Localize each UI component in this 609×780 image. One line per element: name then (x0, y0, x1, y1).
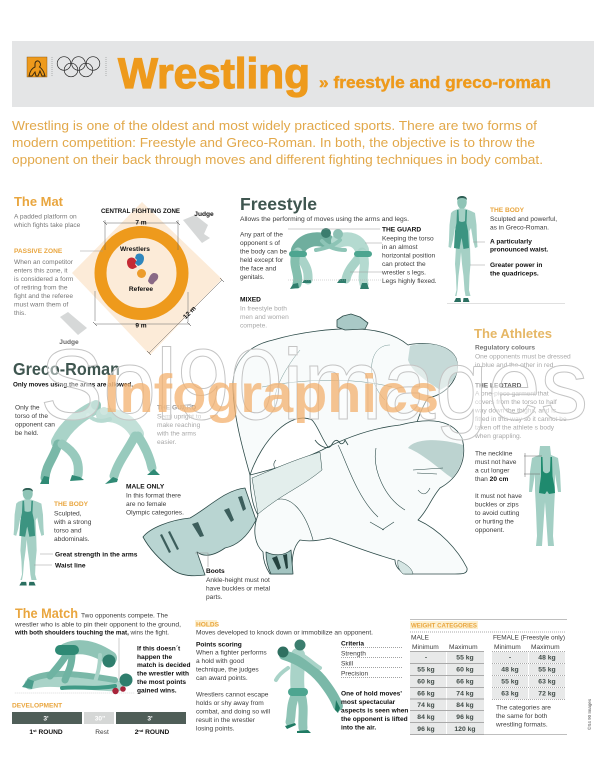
text: the guard: with the arms (156, 430, 197, 438)
table: male: 74 kg (456, 690, 474, 698)
text: only the torso: torso of the (15, 413, 48, 420)
text: greco-roman body notes: abdominals. (54, 536, 90, 543)
text: male only: MALE ONLY (126, 484, 165, 490)
illustration: greco-roman body (14, 488, 44, 586)
zone labels: 12 m (182, 305, 198, 321)
table: male: 120 kg (454, 726, 476, 733)
table: female: 48 kg (538, 654, 556, 662)
head: top wrestler hair (408, 344, 458, 390)
intro paragraph: Wrestling is one of the oldest and most widely practiced sports. There are two forms of (12, 118, 537, 133)
intro paragraph: opponent on their back through moves and different fighting techniques in body combat. (12, 152, 543, 167)
intro paragraph (12, 118, 543, 167)
note: categories: The categories are (496, 704, 551, 712)
heading: weight categories: WEIGHT CATEGORIES (411, 622, 478, 630)
text: freestyle body notes: as in Greco-Roman. (490, 224, 549, 232)
timeline: development: 30" (95, 716, 105, 722)
text: the guard: easier. (157, 439, 177, 446)
criteria list: Skill (341, 660, 354, 668)
table: male: 96 kg (417, 726, 435, 733)
text: any part: genitals. (240, 274, 265, 281)
text: the guard: Semi upright to (157, 414, 202, 420)
text: points scoring: technique, the judges (196, 666, 259, 674)
text: male only: In this format there (126, 492, 181, 500)
text: boots (206, 568, 271, 601)
table: female: 55 kg (538, 666, 556, 674)
zone labels: Referee (129, 286, 153, 293)
text: the leotard: when grappling. (474, 433, 522, 440)
match description: with both shoulders touching the mat, wins the fight. (14, 630, 169, 636)
zone labels: Wrestlers (120, 246, 150, 253)
text: boots: have buckles or metal (206, 586, 271, 592)
table: female: 72 kg (538, 690, 556, 698)
panel: greco-roman (13, 359, 202, 586)
text: greco-roman body notes: Sculpted, (54, 510, 82, 518)
text: spectacular: into the air. (341, 724, 376, 732)
table: female: Minimum (494, 644, 521, 651)
table: male: 60 kg (417, 678, 435, 686)
table: female: 63 kg (538, 678, 556, 686)
text: the guard: can protect the (382, 261, 426, 268)
text: any part: opponent s of (240, 240, 280, 247)
text: greco-roman body notes: with a strong (53, 519, 92, 526)
text: greco-roman body notes: Great strength in the arms (55, 552, 138, 558)
mat description (13, 214, 81, 229)
text: if this doesn't happen: the wrestler with (137, 670, 189, 678)
table: male: 55 kg (456, 654, 474, 662)
zone labels: 7 m (135, 220, 147, 226)
table: male: 84 kg (417, 714, 435, 721)
text: buckles (475, 493, 522, 534)
text: the leotard: way down the thighs, and is (474, 408, 557, 414)
table: male: 96 kg (456, 714, 474, 721)
zone labels: Judge (194, 211, 214, 218)
passive zone text: fight and the referee (14, 293, 73, 300)
illustration: lifting hold (276, 640, 340, 733)
text: the leotard: taken off the athlete s body (475, 424, 555, 432)
table: male: - (425, 654, 427, 662)
mat description: A padded platform on (14, 214, 77, 220)
text: only the torso (15, 404, 55, 437)
heading: freestyle: Freestyle (240, 194, 317, 214)
illustration: pinning wrestlers (15, 638, 135, 694)
text: freestyle body notes: THE BODY (490, 207, 525, 214)
head: bottom wrestler hair (408, 440, 463, 478)
note: categories: the same for both (496, 713, 548, 720)
text: buckles: It must not have (475, 493, 522, 500)
text: points scoring (196, 642, 271, 732)
match description (14, 612, 181, 636)
text: freestyle body notes (490, 207, 557, 278)
illustration: greco-roman wrestlers (40, 400, 160, 484)
table: female: Maximum (531, 644, 560, 651)
timeline: development: 3' (147, 716, 153, 722)
text: mixed: In freestyle both (240, 306, 287, 312)
text: the leotard: covers from the torso to half (475, 399, 557, 406)
text: spectacular: aspects is seen when (341, 708, 408, 714)
text: only the torso: Only the (15, 404, 40, 412)
timeline: development: Rest (95, 729, 109, 736)
heading: holds: HOLDS (196, 622, 220, 628)
match description: Two opponents compete. The (81, 612, 168, 620)
timeline: development: 2 (135, 729, 138, 736)
text: neckline: than 20 cm (475, 476, 509, 483)
text: the leotard (474, 382, 567, 440)
text: neckline: a cut longer (475, 468, 510, 474)
table: male: MALE (411, 634, 430, 642)
table: male: 66 kg (417, 690, 435, 698)
top wrestler back (233, 329, 457, 475)
text: male only (126, 484, 184, 516)
text: boots: Ankle-height must not (206, 577, 270, 584)
zone labels: Judge (59, 339, 79, 346)
text: points scoring: a hold with good (196, 658, 244, 665)
text: male only: are no female (126, 501, 167, 508)
passive zone text: PASSIVE ZONE (14, 248, 63, 255)
text: mixed: men and women (240, 314, 289, 321)
freestyle description: Allows the performing of moves using the arms and legs. (240, 216, 409, 223)
icon: olympic rings (52, 57, 106, 77)
timeline: development: DEVELOPMENT (12, 702, 62, 710)
text: boots: Boots (206, 568, 225, 575)
text: neckline: The neckline (475, 450, 513, 458)
text: neckline: must not have (475, 459, 517, 466)
table: female: - (509, 654, 511, 662)
table: male: Minimum (412, 644, 439, 651)
text: spectacular: One of hold moves' (341, 690, 402, 698)
text: freestyle body notes: pronounced waist. (490, 246, 548, 254)
table: male: 55 kg (417, 666, 435, 674)
table: female: 48 kg (501, 666, 519, 674)
zone labels: CENTRAL FIGHTING ZONE (101, 208, 181, 215)
panel: the mat (12, 194, 592, 736)
heading: greco-roman: Greco-Roman (13, 359, 120, 379)
timeline: development: 1 (29, 729, 33, 736)
heading: the mat: The Mat (14, 194, 64, 209)
text: points scoring: Points scoring (196, 642, 242, 648)
text: mixed (240, 296, 289, 330)
passive zone text: of retiring from the (14, 284, 68, 292)
table: male: Maximum (449, 644, 478, 651)
text: the leotard: THE LEOTARD (475, 382, 522, 390)
timeline: development: st (33, 728, 37, 733)
timeline: development: 3' (43, 716, 49, 722)
text: regulatory colours (475, 344, 571, 369)
illustration: freestyle wrestlers (290, 228, 369, 289)
text: points scoring: losing points. (196, 726, 235, 732)
text: regulatory colours: in blue and the other in red. (475, 362, 555, 369)
holds description: Moves developed to knock down or immobilize an opponent. (196, 630, 373, 636)
text: buckles: opponent. (475, 527, 505, 534)
panel: the match (12, 606, 191, 736)
note: categories (495, 704, 551, 728)
criteria list: Criteria (341, 640, 364, 648)
intro paragraph: modern competition: Freestyle and Greco-Roman. In both, the objective is to throw the (12, 135, 535, 150)
text: points scoring: can award points. (196, 675, 248, 682)
zone labels: 9 m (135, 322, 147, 330)
credit: ©S4 90 Images (586, 698, 592, 730)
table: female: FEMALE (Freestyle only) (493, 634, 565, 642)
text: if this doesn't happen: the most points (137, 679, 186, 686)
text: greco-roman body notes: THE BODY (54, 501, 89, 508)
text: points scoring: When a fighter performs (196, 650, 267, 656)
text: the leotard: A one-piece garment that (475, 390, 549, 398)
greco-roman description: Only moves using the arms are allowed. (13, 382, 133, 388)
mat diagram (59, 202, 224, 355)
title: Wrestling (118, 50, 310, 98)
text: only the torso: be held. (15, 430, 39, 437)
text: if this doesn't happen (137, 646, 191, 694)
icon: wrestling pictogram (27, 57, 47, 77)
illustration: freestyle body (448, 196, 478, 302)
illustration: central wrestlers line drawing (143, 314, 467, 576)
heading: the match: The Match (15, 606, 78, 621)
text: any part: the face and (240, 266, 277, 272)
table: male: 84 kg (456, 702, 474, 709)
table: female (492, 634, 565, 700)
passive zone text: is considered a form (14, 276, 74, 283)
text: the guard: THE GUARD (157, 404, 196, 412)
text: points scoring: result in the wrestler (196, 717, 256, 724)
text: spectacular: the opponent is lifted (341, 716, 408, 723)
text: any part: the body can be (240, 248, 287, 256)
text: male only: Olympic categories. (126, 510, 184, 516)
text: boots: parts. (206, 594, 223, 601)
bottom wrestler body (250, 421, 467, 574)
mat description: which fights take place (13, 222, 81, 229)
text: the guard: THE GUARD (382, 226, 421, 234)
header band (12, 41, 594, 107)
text: spectacular (341, 690, 408, 732)
icon: wrestlers and referee (127, 254, 158, 284)
passive zone text: When an competitor (14, 259, 74, 266)
passive zone text (14, 248, 74, 317)
text: the guard: Legs highly flexed. (382, 278, 437, 285)
criteria list: Precision (341, 670, 368, 678)
passive zone text: this. (14, 310, 26, 317)
panel: weight categories (410, 620, 567, 734)
panel: freestyle (240, 194, 565, 330)
table: male: 74 kg (417, 702, 435, 709)
match description: wrestler who is able to pin their opponent to the ground, (14, 622, 181, 628)
timeline: development: ROUND (143, 729, 170, 736)
table: female: 55 kg (501, 678, 519, 686)
text: freestyle body notes: Sculpted and powerful, (490, 216, 557, 223)
note: categories: wrestling formats. (495, 722, 548, 728)
text: regulatory colours: Regulatory colours (475, 344, 535, 352)
table: male (410, 634, 484, 734)
illustration: leotard figure (524, 446, 561, 546)
text: any part: held except for (240, 257, 284, 264)
subtitle: » freestyle and greco-roman (319, 74, 551, 92)
text: the guard: Keeping the torso (382, 236, 434, 242)
text: freestyle body notes: A particularly (490, 238, 532, 246)
table: male: 66 kg (456, 678, 474, 686)
text: if this doesn't happen: If this doesn´t (137, 646, 181, 652)
table: female: 63 kg (501, 690, 519, 698)
text: the guard: make reaching (157, 422, 201, 429)
watermark: Sol90images: Sol90images (40, 329, 588, 441)
text: the guard (156, 404, 202, 446)
criteria list (341, 640, 402, 678)
text: neckline (475, 450, 517, 483)
text: if this doesn't happen: match is decided (137, 662, 191, 669)
text: spectacular: most spectacular (341, 699, 396, 706)
text: greco-roman body notes: torso and (54, 528, 82, 534)
text: the guard (381, 226, 437, 285)
passive zone text: must warn them of (14, 302, 68, 308)
passive zone text: enters this zone, it (14, 268, 68, 274)
text: greco-roman body notes: Waist line (55, 562, 86, 570)
text: any part: Any part of the (240, 232, 283, 238)
text: greco-roman body notes (53, 501, 138, 570)
panel: holds (195, 620, 408, 733)
text: if this doesn't happen: gained wins. (137, 688, 177, 694)
text: buckles: or hurting the (475, 518, 514, 526)
criteria list: Strength (341, 650, 366, 658)
text: points scoring: holds or shy away from (196, 700, 264, 707)
text: any part (240, 232, 287, 281)
text: freestyle body notes: Greater power in (490, 262, 542, 269)
text: mixed: compete. (240, 322, 267, 330)
text: freestyle body notes: the quadriceps. (490, 270, 539, 278)
text: points scoring: combat, and doing so will (196, 708, 271, 716)
panel: the athletes (474, 326, 571, 546)
text: the leotard: fitted in this way so it cannot be (475, 416, 567, 423)
timeline: development: ROUND (37, 729, 63, 736)
text: the guard: wrestler s legs. (381, 270, 426, 276)
text: points scoring: Wrestlers cannot escape (196, 692, 269, 698)
boots (143, 488, 256, 576)
text: mixed: MIXED (240, 296, 261, 304)
text: the guard: horizontal position (382, 252, 435, 260)
text: the guard: in an almost (382, 244, 418, 251)
text: if this doesn't happen: happen the (137, 654, 173, 661)
text: regulatory colours: One opponents must be dressed (475, 354, 571, 360)
text: buckles: buckles or zips (475, 502, 519, 508)
zone labels (59, 208, 214, 346)
timeline: development (12, 702, 186, 736)
text: only the torso: opponent can (15, 422, 55, 428)
table: male: 60 kg (456, 666, 474, 674)
watermark: Infographics: Infographics (104, 364, 439, 424)
text: buckles: to avoid cutting (475, 510, 520, 517)
heading: the athletes: The Athletes (474, 326, 552, 341)
timeline: development: nd (138, 728, 144, 733)
